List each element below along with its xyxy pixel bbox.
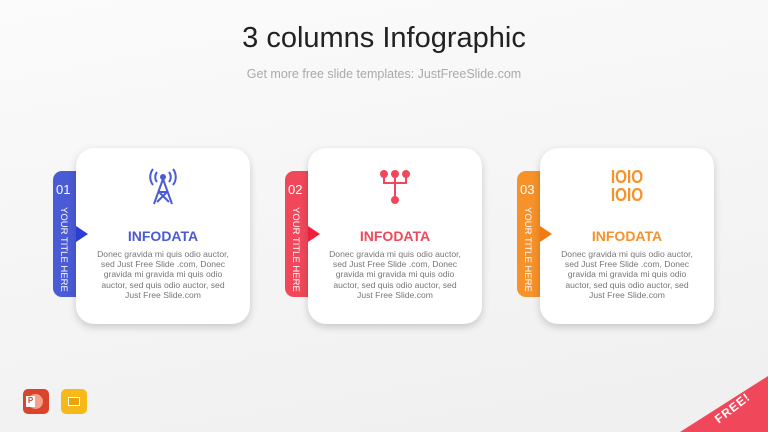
icon: powerpoint <box>23 389 49 414</box>
heading: INFODATA <box>128 228 198 244</box>
heading: INFODATA <box>592 228 662 244</box>
panel: column 1 <box>53 148 254 330</box>
title: 3 columns Infographic <box>242 22 526 54</box>
icon: binary <box>611 167 643 205</box>
text block: Donec gravida mi quis odio auctor, sed Just Free Slide .com, Donec gravida mi gravida mi quis odio auctor, sed quis odio auctor, sed Just Free Slide.com <box>97 249 229 300</box>
heading: INFODATA <box>360 228 430 244</box>
panel: column 3: 03 <box>520 182 534 197</box>
panel: column 1: YOUR TITLE HERE <box>58 207 69 292</box>
text block: Donec gravida mi quis odio auctor, sed Just Free Slide .com, Donec gravida mi gravida mi quis odio auctor, sed quis odio auctor, sed Just Free Slide.com <box>329 249 461 300</box>
subtitle: Get more free slide templates: JustFreeSlide.com <box>247 67 521 81</box>
icon: hierarchy <box>380 170 410 204</box>
icon: antenna tower <box>149 168 177 204</box>
icon: binary: IOIO <box>611 167 643 187</box>
panel: column 2 <box>285 148 486 330</box>
ribbon: free: FREE! <box>712 390 753 426</box>
icon: powerpoint: P <box>28 396 33 405</box>
text block: Donec gravida mi quis odio auctor, sed Just Free Slide .com, Donec gravida mi gravida mi quis odio auctor, sed quis odio auctor, sed Just Free Slide.com <box>561 249 693 300</box>
panel: column 3: YOUR TITLE HERE <box>522 207 533 292</box>
panel: column 3 <box>517 148 718 330</box>
icon: google slides <box>61 389 87 414</box>
panel: column 1: 01 <box>56 182 70 197</box>
panel: column 2: 02 <box>288 182 302 197</box>
icon: binary: IOIO <box>611 185 643 205</box>
ribbon: free <box>680 376 768 432</box>
panel: column 2: YOUR TITLE HERE <box>290 207 301 292</box>
